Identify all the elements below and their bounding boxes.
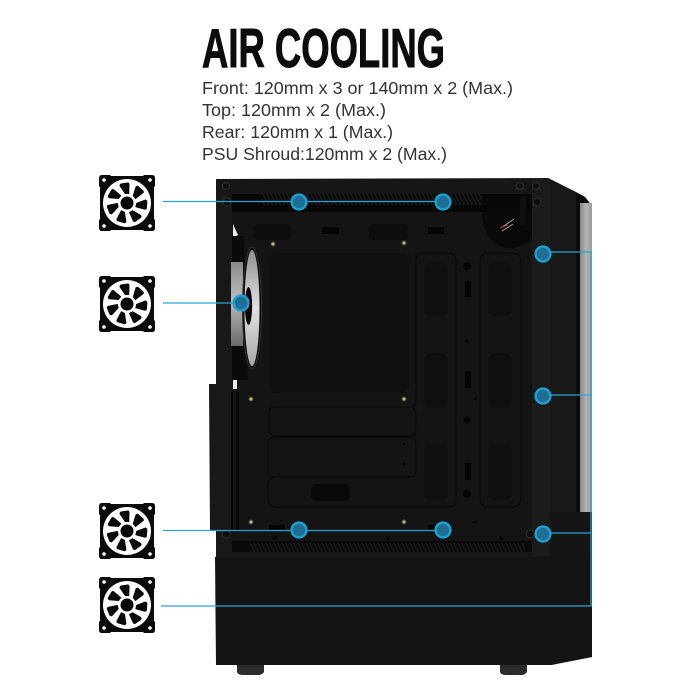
specifications text: PSU Shroud:120mm x 2 (Max.) xyxy=(202,144,447,164)
silver light strip xyxy=(576,192,592,512)
side panel flap xyxy=(209,384,216,530)
title: AIR COOLING xyxy=(202,17,445,79)
callout lines xyxy=(161,202,591,606)
left comb vent xyxy=(231,392,239,532)
fan icon: shroud upper xyxy=(99,503,155,559)
specifications text: Top: 120mm x 2 (Max.) xyxy=(202,100,386,120)
gold screws xyxy=(249,241,406,524)
shroud notch xyxy=(550,512,592,557)
motherboard slots and standoffs xyxy=(269,262,503,540)
fan icon: shroud lower xyxy=(99,577,155,633)
bottom oval cutout xyxy=(311,484,350,501)
top mesh xyxy=(232,194,532,212)
rear fan xyxy=(231,236,262,380)
left frame xyxy=(216,179,232,557)
specifications text: Front: 120mm x 3 or 140mm x 2 (Max.) xyxy=(202,78,513,98)
fan icon: top xyxy=(99,175,155,231)
case body xyxy=(216,178,592,665)
top bar xyxy=(216,179,532,194)
cable grommet and wires xyxy=(482,197,532,248)
specifications text: Rear: 120mm x 1 (Max.) xyxy=(202,122,393,142)
bottom mesh xyxy=(232,541,532,552)
top holes xyxy=(254,224,444,240)
computer case xyxy=(209,178,592,675)
interior back plate xyxy=(232,194,532,552)
corner screws xyxy=(222,182,541,538)
base shroud xyxy=(215,557,592,665)
white openings xyxy=(233,224,238,238)
feet xyxy=(237,665,264,675)
specifications text xyxy=(202,78,513,164)
CPU cutout xyxy=(269,253,409,393)
callout dots xyxy=(234,195,550,541)
cable management columns xyxy=(424,262,512,500)
front pillar xyxy=(532,178,550,557)
fan icon: rear xyxy=(99,276,155,332)
